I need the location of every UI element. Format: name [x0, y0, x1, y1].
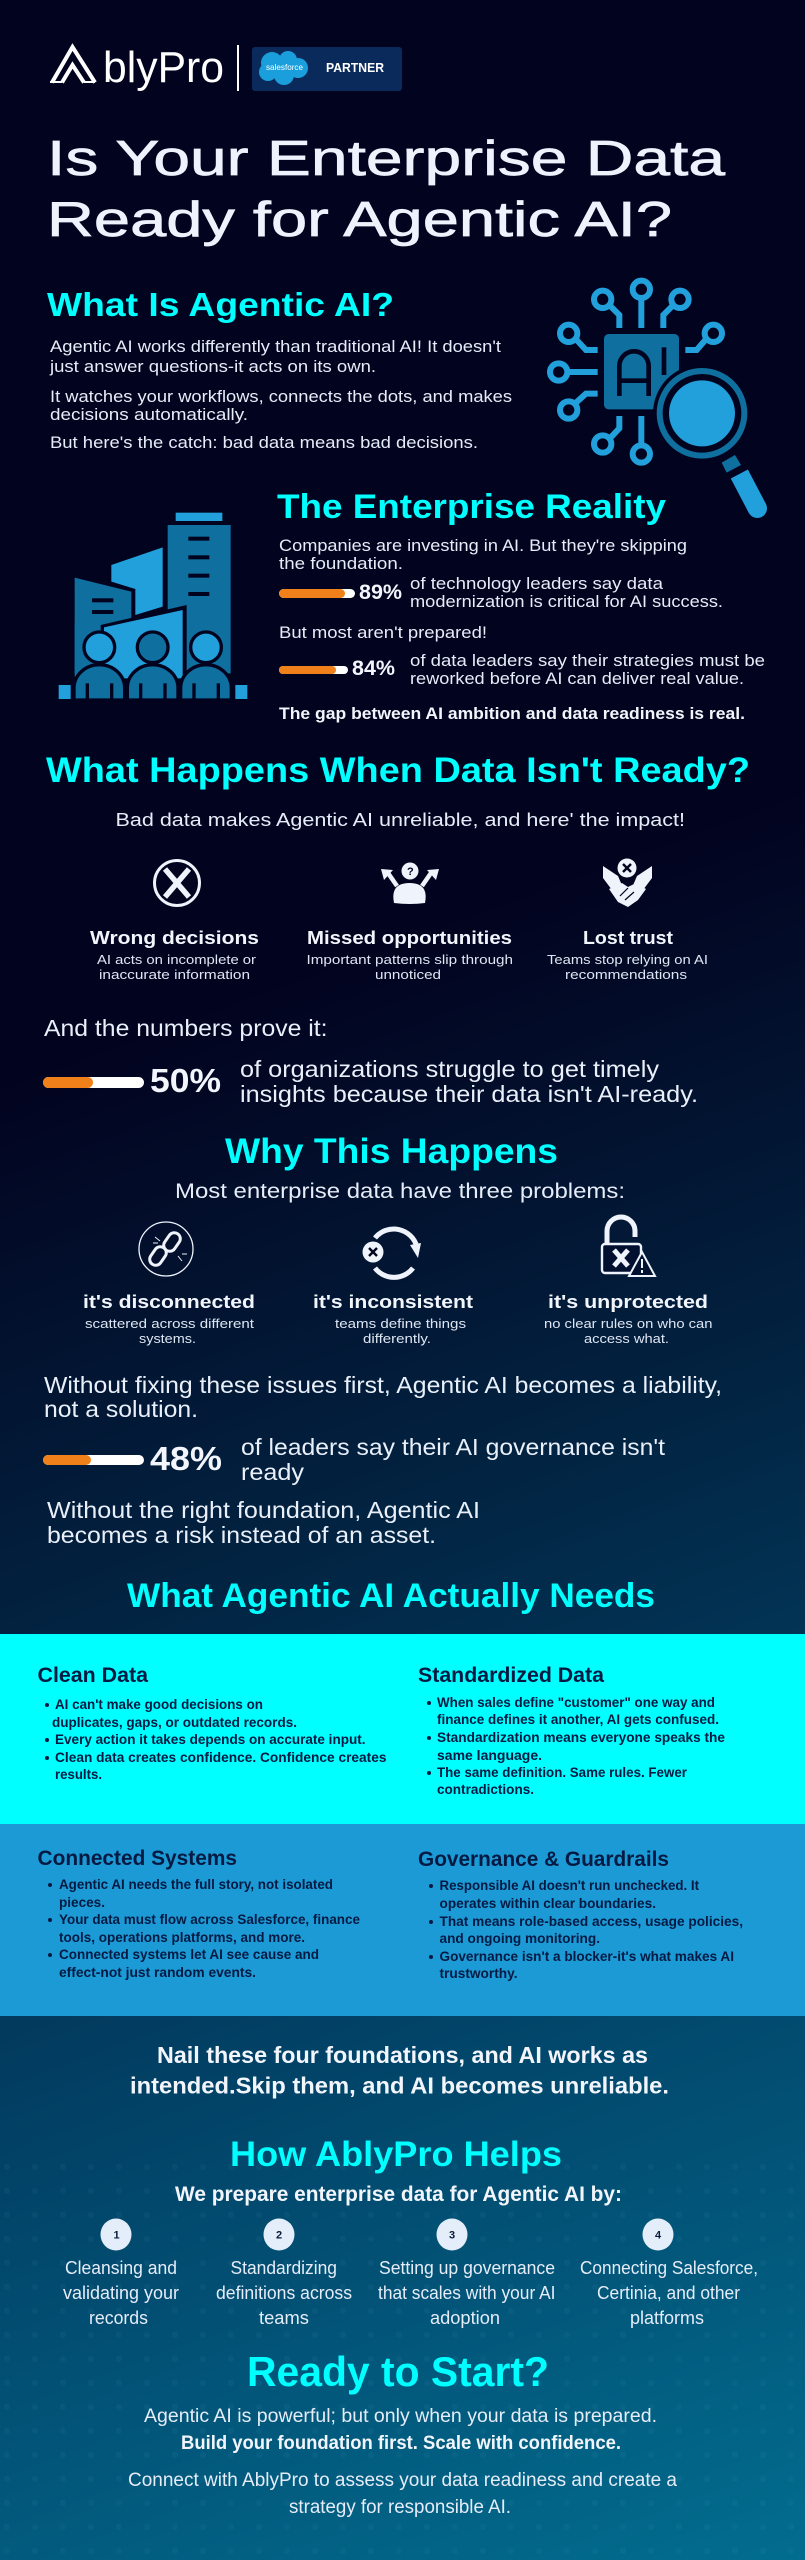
description: scattered across different [85, 1316, 254, 1331]
text block: agentic AI intro: Agentic AI works differently than traditional AI! It doesn't [50, 338, 501, 356]
text block: skipping the foundation [279, 537, 687, 573]
card: clean data: duplicates, gaps, or outdated records. [52, 1715, 297, 1730]
stat: 84%: 84% [352, 657, 395, 680]
step 3: that scales with your AI [378, 2283, 556, 2303]
step 4: Connecting Salesforce, [580, 2258, 758, 2278]
card: standardized data: The same definition. Same rules. Fewer [437, 1765, 688, 1780]
heading: The Enterprise Reality: The Enterprise Reality [277, 488, 666, 526]
card: governance and guardrails: Responsible AI doesn't run unchecked. It [440, 1878, 699, 1893]
panel: cyan band [0, 1634, 805, 1824]
stat: 84% [279, 652, 765, 688]
step 1: records [89, 2308, 148, 2328]
text block: agentic AI intro: It watches your workflows, connects the dots, and makes [50, 388, 512, 406]
description: Important patterns slip through [306, 952, 513, 967]
logo: AblyPro [50, 43, 224, 92]
step 2 [216, 2218, 352, 2328]
icon: unlocked padlock with warning [602, 1217, 655, 1276]
text block: risk instead of asset [47, 1497, 480, 1548]
dotted background pattern [0, 2150, 805, 2560]
stat: 89%: modernization is critical for AI success. [410, 593, 723, 611]
description: systems. [139, 1331, 196, 1346]
card: standardized data: When sales define "customer" one way and [437, 1695, 715, 1710]
card: governance and guardrails: Governance isn't a blocker-it's what makes AI [440, 1949, 734, 1964]
description [85, 1316, 254, 1346]
text: bad data impact: Bad data makes Agentic AI unreliable, and here' the impact! [116, 810, 685, 830]
card: governance and guardrails: operates within clear boundaries. [440, 1896, 656, 1911]
text block: liability warning: Without fixing these issues first, Agentic AI becomes a liability, [44, 1372, 722, 1398]
step 1 [63, 2218, 179, 2328]
divider [237, 45, 239, 91]
card: standardized data [418, 1664, 725, 1797]
step 3: 3 [449, 2230, 455, 2242]
stat: 89% [279, 575, 723, 611]
logo header [50, 43, 402, 92]
description [335, 1316, 467, 1346]
description [544, 1316, 712, 1346]
card: clean data: Clean Data [38, 1664, 148, 1687]
card: connected systems: pieces. [59, 1895, 105, 1910]
panel: blue band [0, 1824, 805, 2016]
stat: 50% [43, 1056, 698, 1107]
panel: the enterprise reality [277, 488, 765, 723]
card: governance and guardrails: trustworthy. [440, 1966, 518, 1981]
panel: it's inconsistent [313, 1229, 473, 1346]
description: access what. [584, 1331, 669, 1346]
label: it's inconsistent: it's inconsistent [313, 1291, 473, 1312]
heading: What Happens When Data Isn't Ready?: What Happens When Data Isn't Ready? [46, 751, 750, 790]
text block: risk instead of asset: Without the right foundation, Agentic AI [47, 1497, 480, 1523]
step 3: Setting up governance [379, 2258, 555, 2278]
card: standardized data: contradictions. [437, 1782, 534, 1797]
card: clean data: Clean data creates confidence. Confidence creates [55, 1750, 387, 1765]
text block: agentic AI intro: But here's the catch: bad data means bad decisions. [50, 434, 478, 452]
salesforce partner badge: PARTNER [326, 60, 385, 75]
icon: broken cycle [362, 1229, 421, 1277]
label: it's disconnected: it's disconnected [83, 1291, 255, 1312]
description: inaccurate information [99, 967, 250, 982]
title: Is Your Enterprise Data [47, 132, 726, 186]
description: recommendations [565, 967, 688, 982]
text block: liability warning: not a solution. [44, 1396, 198, 1422]
description [97, 952, 257, 982]
text: most aren't prepared: But most aren't prepared! [279, 624, 487, 642]
stat: 48%: 48% [150, 1440, 222, 1477]
step 3: adoption [430, 2308, 500, 2328]
panel: lost trust [547, 858, 708, 982]
icon: crossed circle [154, 860, 200, 906]
text block: agentic AI intro [49, 338, 512, 452]
heading: What Agentic AI Actually Needs: What Agentic AI Actually Needs [127, 1577, 655, 1615]
heading: How AblyPro Helps: How AblyPro Helps [230, 2135, 562, 2174]
stat: 48%: ready [241, 1459, 305, 1485]
stat: 84%: of data leaders say their strategies must be [410, 652, 765, 670]
card: clean data: Every action it takes depends on accurate input. [55, 1732, 366, 1747]
card: standardized data: finance defines it another, AI gets confused. [437, 1712, 719, 1727]
panel: missed opportunities [306, 862, 513, 982]
icon: broken link [139, 1222, 193, 1276]
stat: 89%: of technology leaders say data [410, 575, 664, 593]
icon: person with diverging arrows [381, 862, 439, 904]
description: teams define things [335, 1316, 467, 1331]
callout: four foundations: Nail these four foundations, and AI works as [157, 2042, 648, 2068]
text block: risk instead of asset: becomes a risk instead of an asset. [47, 1522, 436, 1548]
icon: person with diverging arrows: ? [407, 866, 414, 878]
text: numbers prove it: And the numbers prove it: [44, 1015, 328, 1041]
panel: wrong decisions [90, 860, 259, 982]
label: wrong decisions: Wrong decisions [90, 927, 259, 948]
text block: call to action: Build your foundation first. Scale with confidence. [181, 2433, 621, 2454]
text block: call to action: Agentic AI is powerful; but only when your data is prepared. [144, 2406, 657, 2427]
title [47, 132, 726, 247]
card: governance and guardrails: Governance & Guardrails [418, 1848, 669, 1871]
stat: 48% [43, 1434, 666, 1485]
text block: call to action: Connect with AblyPro to assess your data readiness and create a [128, 2470, 677, 2491]
card: connected systems: effect-not just random events. [59, 1965, 256, 1980]
callout: four foundations [130, 2042, 669, 2098]
stat: 50%: of organizations struggle to get timely [240, 1056, 660, 1082]
text: three problems: Most enterprise data have three problems: [175, 1179, 625, 1203]
step 4: Certinia, and other [597, 2283, 740, 2303]
description: AI acts on incomplete or [97, 952, 257, 967]
stat: 48%: of leaders say their AI governance isn't [241, 1434, 666, 1460]
panel: it's disconnected [83, 1222, 255, 1346]
card: governance and guardrails [418, 1848, 743, 1981]
step 2: 2 [276, 2230, 282, 2242]
step 2: definitions across [216, 2283, 352, 2303]
stat: 89%: 89% [359, 581, 402, 604]
card: standardized data: same language. [437, 1748, 542, 1763]
label: missed opportunities: Missed opportunities [307, 927, 512, 948]
card: connected systems: tools, operations platforms, and more. [59, 1930, 305, 1945]
text block: call to action: strategy for responsible AI. [289, 2497, 511, 2518]
icon: broken handshake [603, 858, 652, 907]
card: clean data: results. [55, 1767, 102, 1782]
card: standardized data: Standardization means everyone speaks the [437, 1730, 725, 1745]
step 1: Cleansing and [65, 2258, 177, 2278]
card: clean data [38, 1664, 387, 1782]
callout: four foundations: intended.Skip them, and AI becomes unreliable. [130, 2072, 669, 2098]
text block: skipping the foundation: Companies are investing in AI. But they're skipping [279, 537, 687, 555]
card: connected systems: Connected Systems [38, 1847, 237, 1870]
description: unnoticed [375, 967, 441, 982]
card: connected systems [38, 1847, 360, 1980]
logo: AblyPro: blyPro [103, 43, 224, 92]
step 2: Standardizing [230, 2258, 337, 2278]
step 1: 1 [114, 2230, 120, 2242]
salesforce partner badge: salesforce [266, 62, 303, 72]
card: connected systems: Your data must flow across Salesforce, finance [59, 1912, 360, 1927]
heading: Ready to Start?: Ready to Start? [247, 2348, 549, 2395]
description: differently. [363, 1331, 431, 1346]
text block: agentic AI intro: decisions automatically. [50, 406, 248, 424]
description [306, 952, 513, 982]
card: governance and guardrails: That means role-based access, usage policies, [440, 1914, 743, 1929]
step 3 [378, 2218, 556, 2328]
stat: 50%: 50% [150, 1062, 221, 1099]
title: Ready for Agentic AI? [47, 193, 672, 247]
card: connected systems: Agentic AI needs the full story, not isolated [59, 1877, 333, 1892]
card: standardized data: Standardized Data [418, 1664, 604, 1687]
description: no clear rules on who can [544, 1316, 712, 1331]
panel: it's unprotected [544, 1217, 712, 1346]
stat: 50%: insights because their data isn't AI-ready. [240, 1081, 698, 1107]
description: Teams stop relying on AI [547, 952, 708, 967]
text: we prepare: We prepare enterprise data for Agentic AI by: [175, 2183, 622, 2206]
label: lost trust: Lost trust [583, 927, 673, 948]
label: it's unprotected: it's unprotected [548, 1291, 708, 1312]
callout: the gap: The gap between AI ambition and data readiness is real. [279, 705, 745, 723]
step 4: 4 [655, 2230, 662, 2242]
card: governance and guardrails: and ongoing monitoring. [440, 1931, 600, 1946]
text block: liability warning [44, 1372, 722, 1422]
text block: skipping the foundation: the foundation. [279, 555, 403, 573]
step 4 [580, 2218, 758, 2328]
text block: agentic AI intro: just answer questions-it acts on its own. [49, 358, 376, 376]
description [547, 952, 708, 982]
text block: call to action [128, 2406, 677, 2518]
heading: Why This Happens: Why This Happens [225, 1132, 558, 1171]
heading: What Is Agentic AI?: What Is Agentic AI? [47, 286, 394, 323]
step 1: validating your [63, 2283, 179, 2303]
stat: 84%: reworked before AI can deliver real value. [410, 670, 744, 688]
card: clean data: AI can't make good decisions on [55, 1697, 263, 1712]
icon: enterprise buildings and people [59, 513, 247, 700]
step 4: platforms [630, 2308, 704, 2328]
icon: AI chip with magnifier [550, 281, 767, 518]
card: connected systems: Connected systems let AI see cause and [59, 1947, 319, 1962]
salesforce partner badge [252, 47, 402, 91]
step 2: teams [259, 2308, 309, 2328]
